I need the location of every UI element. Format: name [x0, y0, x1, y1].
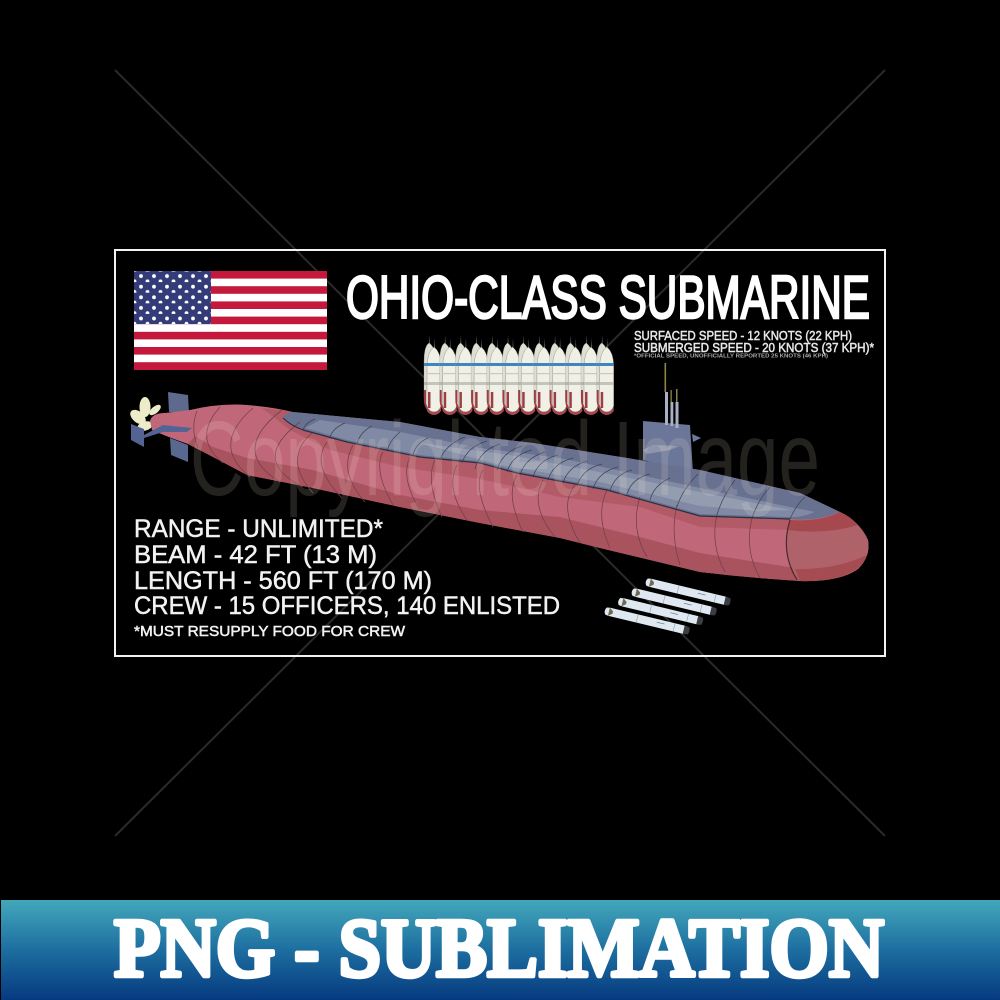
- stats text block: RANGE - UNLIMITED*: [134, 515, 383, 543]
- stats text block: *MUST RESUPPLY FOOD FOR CREW: [134, 623, 406, 640]
- sail plane: [643, 445, 680, 454]
- banner text: PNG - SUBLIMATION: [114, 902, 884, 995]
- bow: [787, 512, 869, 581]
- stats text block: CREW - 15 OFFICERS, 140 ENLISTED: [134, 592, 560, 620]
- icon: propeller: [128, 397, 163, 432]
- submarine illustration: [128, 363, 869, 581]
- speed text block: [634, 329, 874, 360]
- bow lower band: [795, 555, 867, 581]
- stats text block: LENGTH - 560 FT (170 M): [134, 567, 432, 595]
- panel: specification card frame: [115, 250, 885, 656]
- sail fin: [692, 434, 701, 442]
- speed text block: *OFFICIAL SPEED, UNOFFICIALLY REPORTED 25 KNOTS (46 KPH): [634, 354, 828, 360]
- stats text block: [134, 515, 560, 640]
- lower rudder: [170, 438, 188, 462]
- speed text block: SUBMERGED SPEED - 20 KNOTS (37 KPH)*: [634, 341, 874, 355]
- icon: cruise missiles: [604, 577, 731, 635]
- stats text block: BEAM - 42 FT (13 M): [134, 541, 377, 569]
- watermark cross lines: [115, 70, 885, 836]
- deck highlight: [420, 443, 790, 511]
- upper rudder: [168, 392, 189, 413]
- sail: [643, 421, 693, 473]
- icon: missile tubes row: [424, 335, 614, 415]
- icon: american flag: [134, 271, 327, 370]
- hull lower band: [188, 436, 800, 581]
- masts: [664, 363, 678, 428]
- bow upper band: [788, 512, 858, 532]
- bottom banner: [1, 900, 1000, 1000]
- deck: [283, 412, 840, 520]
- hull ribs: [194, 407, 797, 580]
- deck mid band: [305, 420, 815, 517]
- stabilizer and arm: [131, 424, 192, 447]
- hull upper band: [262, 408, 790, 530]
- hull: [150, 405, 869, 581]
- deck ribs: [283, 418, 805, 519]
- speed text block: SURFACED SPEED - 12 KNOTS (22 KPH): [634, 329, 852, 343]
